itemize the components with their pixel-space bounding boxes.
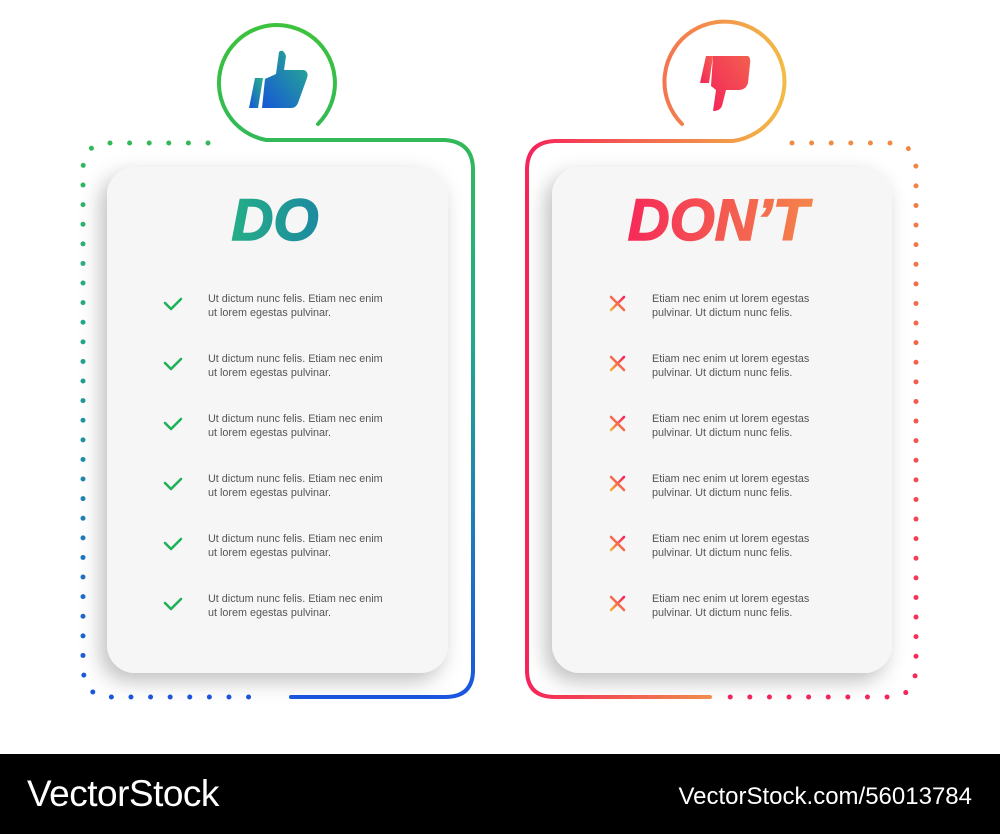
- list: dont items: Etiam nec enim ut lorem egestas: [652, 593, 810, 605]
- heading: DO: DO: [232, 188, 318, 253]
- list: dont items: pulvinar. Ut dictum nunc felis.: [652, 427, 792, 439]
- dotted border: dont: [730, 143, 916, 697]
- list: dont items: Etiam nec enim ut lorem egestas: [652, 533, 810, 545]
- list: do items: Ut dictum nunc felis. Etiam nec enim: [208, 473, 383, 485]
- list: do items: ut lorem egestas pulvinar.: [208, 307, 331, 319]
- list: do items: [165, 293, 383, 619]
- list: dont items: Etiam nec enim ut lorem egestas: [652, 413, 810, 425]
- list: do items: Ut dictum nunc felis. Etiam nec enim: [208, 413, 383, 425]
- icon: thumbs up: [249, 51, 308, 108]
- list: do items: ut lorem egestas pulvinar.: [208, 367, 331, 379]
- heading: DON'T: DON’T: [628, 188, 813, 253]
- list: dont items: Etiam nec enim ut lorem egestas: [652, 293, 810, 305]
- list: do items: ut lorem egestas pulvinar.: [208, 547, 331, 559]
- list: do items: Ut dictum nunc felis. Etiam nec enim: [208, 533, 383, 545]
- list: do items: Ut dictum nunc felis. Etiam nec enim: [208, 593, 383, 605]
- panel: dont card: [552, 167, 892, 673]
- list: dont items: pulvinar. Ut dictum nunc felis.: [652, 487, 792, 499]
- connector line: dont: [527, 22, 784, 697]
- list: do items: ut lorem egestas pulvinar.: [208, 427, 331, 439]
- list: do items: ut lorem egestas pulvinar.: [208, 607, 331, 619]
- list: dont items: Etiam nec enim ut lorem egestas: [652, 353, 810, 365]
- panel: do card: [107, 167, 448, 673]
- list: dont items: pulvinar. Ut dictum nunc felis.: [652, 367, 792, 379]
- footer url: VectorStock.com/56013784: [678, 783, 972, 810]
- dotted border: do: [83, 143, 268, 697]
- footer logo: VectorStock: [27, 773, 220, 814]
- list: dont items: pulvinar. Ut dictum nunc felis.: [652, 547, 792, 559]
- list: dont items: pulvinar. Ut dictum nunc felis.: [652, 307, 792, 319]
- icon: thumbs down: [700, 56, 750, 111]
- connector line: do: [219, 25, 473, 697]
- list: dont items: Etiam nec enim ut lorem egestas: [652, 473, 810, 485]
- list: dont items: pulvinar. Ut dictum nunc felis.: [652, 607, 792, 619]
- footer bar: [0, 754, 1000, 834]
- list: do items: ut lorem egestas pulvinar.: [208, 487, 331, 499]
- list: do items: Ut dictum nunc felis. Etiam nec enim: [208, 353, 383, 365]
- list: do items: Ut dictum nunc felis. Etiam nec enim: [208, 293, 383, 305]
- list: dont items: [611, 293, 810, 619]
